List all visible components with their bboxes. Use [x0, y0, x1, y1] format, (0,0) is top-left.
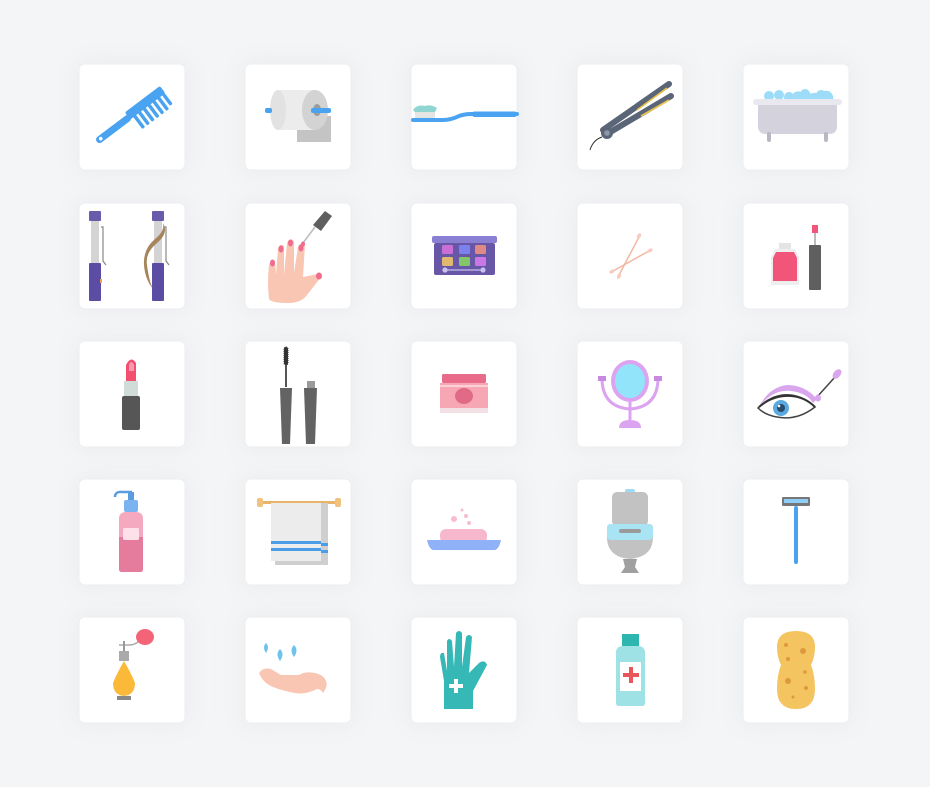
card: comb	[73, 58, 191, 176]
icon: perfume atomizer	[113, 629, 154, 700]
card: hair straightener	[571, 58, 689, 176]
icon: cream jar	[440, 374, 488, 413]
card: toilet paper	[239, 58, 357, 176]
card: nail polish hand	[239, 197, 357, 315]
card: mirror	[571, 335, 689, 453]
icon: eye with brush	[758, 368, 843, 418]
card: curling irons	[73, 197, 191, 315]
card: cream jar	[405, 335, 523, 453]
card: medical glove	[405, 611, 523, 729]
icon: hand with drops	[259, 643, 327, 694]
icon: sponge	[777, 631, 815, 709]
card: bathtub	[737, 58, 855, 176]
card: perfume	[73, 611, 191, 729]
card: medicine bottle	[571, 611, 689, 729]
icon: soap dish	[427, 508, 501, 550]
icon: towel on rail	[257, 498, 341, 565]
icon: toothbrush	[413, 105, 517, 120]
icon: mascara	[280, 347, 317, 444]
icon: curling irons	[89, 211, 169, 301]
card: eye makeup	[737, 335, 855, 453]
icon: bathtub	[753, 89, 842, 142]
card: towel	[239, 473, 357, 591]
card: soap	[405, 473, 523, 591]
card: nail polish bottle	[737, 197, 855, 315]
icon: antiseptic bottle	[616, 634, 645, 706]
card: pump bottle	[73, 473, 191, 591]
icon: nail polish	[771, 225, 821, 290]
icon: hand with polish	[268, 211, 332, 303]
card: razor	[737, 473, 855, 591]
card: lipstick	[73, 335, 191, 453]
card: cotton swabs	[571, 197, 689, 315]
icon: toilet	[607, 489, 653, 573]
icon: flat iron	[590, 84, 671, 150]
card: sponge	[737, 611, 855, 729]
icon: mirror	[598, 360, 662, 428]
icon: glove	[440, 631, 487, 709]
icon: comb	[93, 86, 174, 156]
icon: toilet paper	[265, 90, 331, 142]
icon: palette	[432, 236, 497, 275]
icon: cotton swabs	[609, 233, 653, 279]
card: eyeshadow palette	[405, 197, 523, 315]
icon: lotion pump bottle	[115, 492, 143, 572]
icon: lipstick	[122, 359, 140, 430]
card: mascara	[239, 335, 357, 453]
card: toothbrush	[405, 58, 523, 176]
icon: razor	[782, 497, 810, 564]
card: toilet	[571, 473, 689, 591]
card: hand washing	[239, 611, 357, 729]
